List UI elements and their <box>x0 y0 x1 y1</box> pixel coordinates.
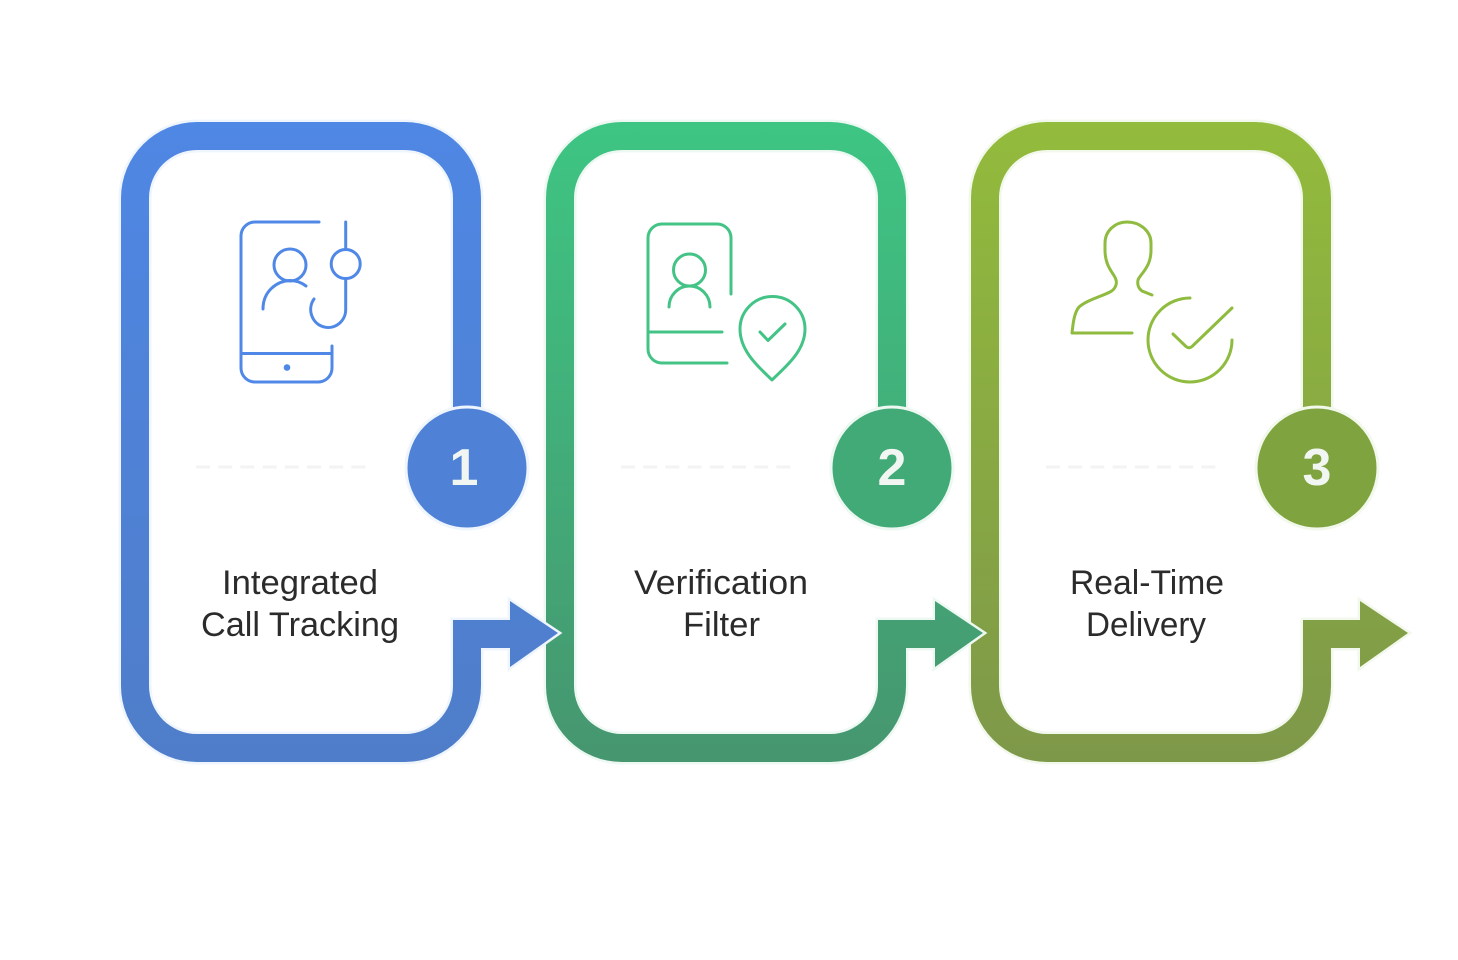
number badge 1: 1 <box>450 439 478 497</box>
divider <box>1046 466 1216 468</box>
label: Real-Time Delivery: Real-Time <box>1070 564 1224 602</box>
icon: phone with person and hook <box>241 222 360 382</box>
panel: step 2 verification filter <box>546 122 983 762</box>
divider <box>196 466 366 468</box>
number badge 1 <box>406 407 528 529</box>
icon: profile card with verification pin <box>648 224 805 380</box>
divider <box>621 466 791 468</box>
label: Verification Filter: Filter <box>683 606 760 644</box>
label: Real-Time Delivery: Delivery <box>1086 606 1206 644</box>
panel: step 3 real-time delivery <box>971 122 1408 762</box>
label: Verification Filter: Verification <box>634 564 808 602</box>
ring and arrow: step 3 <box>971 122 1408 762</box>
number badge 2 <box>831 407 953 529</box>
label: Integrated Call Tracking: Integrated <box>222 564 378 602</box>
icon: person with check mark <box>1072 222 1232 382</box>
ring and arrow: step 1 <box>121 122 558 762</box>
number badge 3: 3 <box>1303 439 1331 497</box>
label: Integrated Call Tracking: Call Tracking <box>201 606 399 644</box>
number badge 3 <box>1256 407 1378 529</box>
panel: step 1 integrated call tracking <box>121 122 558 762</box>
number badge 2: 2 <box>878 439 906 497</box>
ring and arrow: step 2 <box>546 122 983 762</box>
